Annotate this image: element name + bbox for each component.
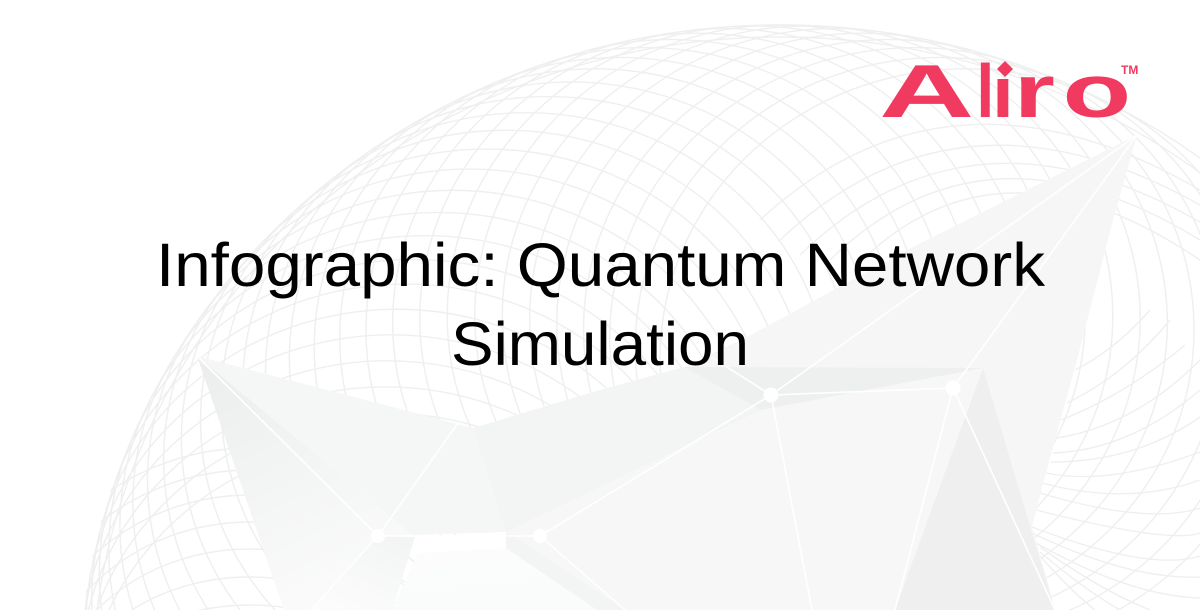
facet: centre plane xyxy=(473,367,761,532)
facet: upper left xyxy=(197,356,506,536)
Aliro logo: TM xyxy=(1121,63,1138,77)
title xyxy=(156,231,1046,378)
Aliro logo: i xyxy=(992,50,1014,134)
facet: bottom centre xyxy=(392,548,597,610)
Aliro logo: l xyxy=(976,49,994,133)
Aliro logo: o xyxy=(1062,50,1131,133)
Aliro logo: r xyxy=(1014,50,1055,133)
Aliro logo: A xyxy=(879,49,974,133)
facet: right triangle xyxy=(895,368,1055,610)
facet: bright strip xyxy=(415,532,506,553)
facet: connecting band xyxy=(684,367,983,410)
facet: lower left xyxy=(311,536,415,610)
faceted network polygons xyxy=(197,135,1137,610)
facet: lower plane xyxy=(506,368,983,610)
facet: dark lower sliver xyxy=(506,532,625,610)
facet: dark left wedge xyxy=(197,356,415,610)
network links and nodes xyxy=(197,135,1137,610)
facet: large right plane xyxy=(473,135,1137,610)
title: Infographic: Quantum Network xyxy=(156,231,1046,299)
title: Simulation xyxy=(451,310,749,378)
Aliro logo xyxy=(882,61,1138,118)
